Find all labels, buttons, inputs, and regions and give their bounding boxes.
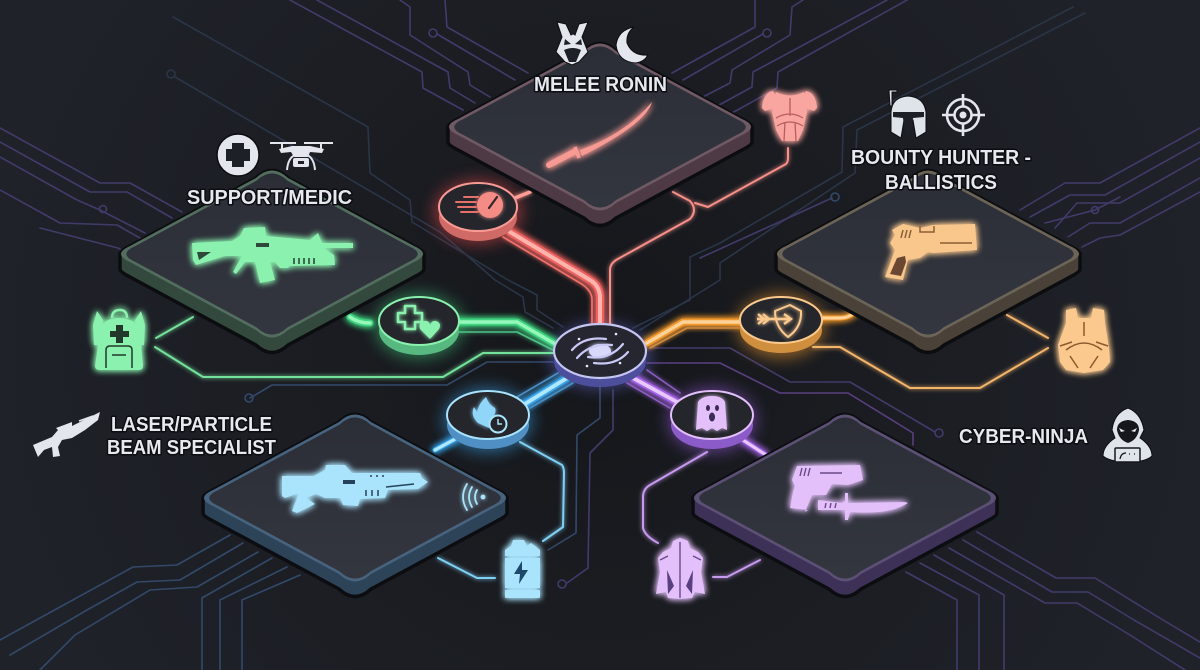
node: orange shield arrow <box>740 297 822 353</box>
icon: medical cross <box>217 134 259 176</box>
icon: samurai chest armor <box>762 91 817 141</box>
icon: stealth jacket <box>656 538 705 599</box>
red connection traces <box>503 148 788 326</box>
heading: melee ronin: MELEE RONIN <box>534 74 667 96</box>
icon: katana <box>549 102 652 165</box>
node: purple ghost <box>671 391 753 449</box>
icon: oni helmet <box>556 22 588 65</box>
icon: plasma rifle <box>282 465 428 513</box>
purple connection traces <box>627 370 766 577</box>
icon: pistol and knife <box>790 465 908 520</box>
heading: bounty hunter ballistics: BOUNTY HUNTER - <box>851 147 1031 169</box>
panel: laser specialist <box>203 414 507 596</box>
heading: laser particle beam specialist: BEAM SPECIALIST <box>107 437 276 459</box>
icon: target reticle <box>942 94 985 136</box>
heading: laser particle beam specialist: LASER/PARTICLE <box>111 414 272 436</box>
node: green medical buff <box>379 297 459 355</box>
glow halos <box>375 180 825 452</box>
icon: pistol <box>885 224 977 280</box>
green connection traces <box>155 317 557 377</box>
heading: bounty hunter ballistics: BALLISTICS <box>885 172 997 194</box>
heading: support medic: SUPPORT/MEDIC <box>187 187 352 209</box>
panel: bounty hunter <box>776 170 1080 352</box>
heading: cyber ninja: CYBER-NINJA <box>959 426 1088 448</box>
panel: cyber ninja <box>693 414 997 596</box>
panel: melee ronin <box>448 44 752 226</box>
panel: support medic <box>120 170 424 352</box>
heading: laser particle beam specialist <box>107 414 276 459</box>
icon: signal emitter <box>463 484 485 510</box>
blue connection traces <box>435 373 573 578</box>
node: blue flame timer <box>447 391 529 449</box>
icon: backpack <box>93 310 145 370</box>
icon: white laser rifle <box>33 412 100 457</box>
heading: bounty hunter ballistics <box>851 147 1031 194</box>
node: central galaxy hub <box>554 324 646 387</box>
icon: assault rifle <box>192 227 353 283</box>
icon: bounty hunter helmet <box>889 90 926 138</box>
icon: crescent moon <box>616 27 648 63</box>
icon: energy battery <box>505 540 540 598</box>
node: red speed dial <box>439 183 517 241</box>
icon: tactical vest <box>1058 308 1110 373</box>
icon: hooded hacker <box>1103 408 1152 462</box>
icon: drone <box>270 142 333 170</box>
orange connection traces <box>647 313 1048 388</box>
